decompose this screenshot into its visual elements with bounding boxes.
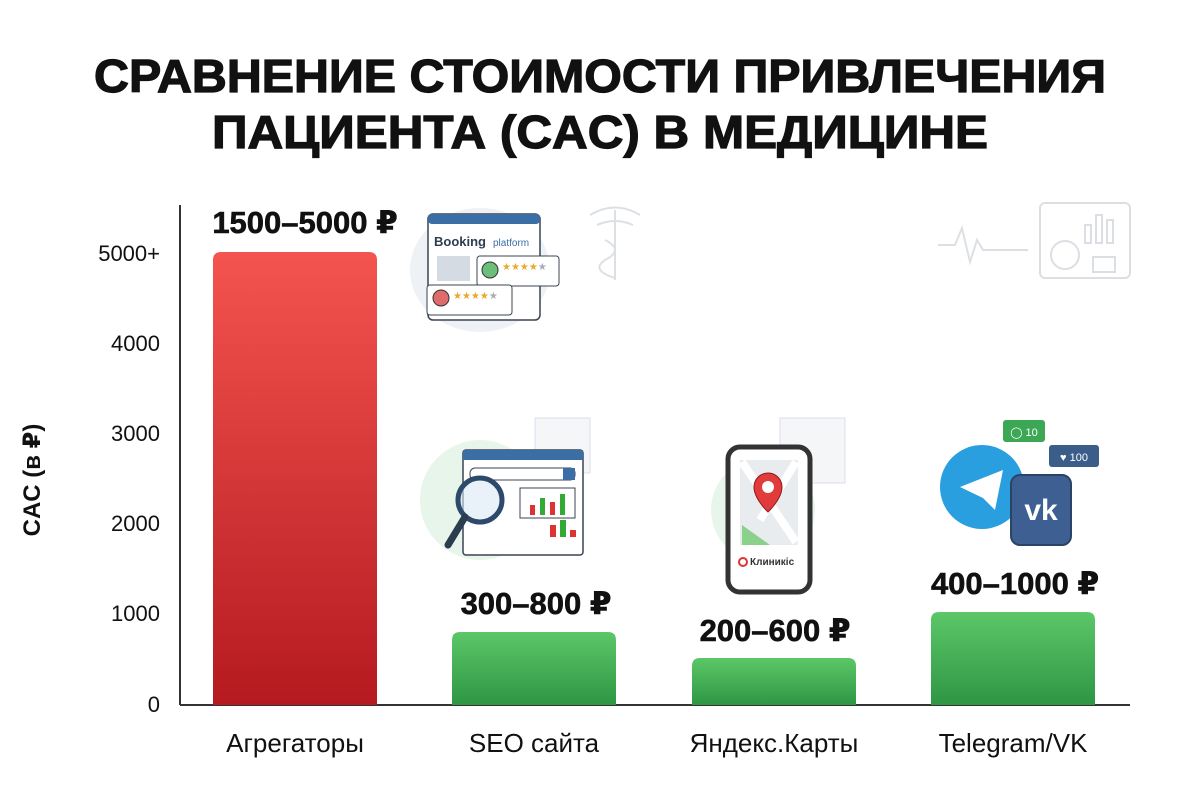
value labels: 1500–5000 ₽ xyxy=(212,205,398,240)
bar: Яндекс xyxy=(692,658,856,705)
icon: Telegram / VK: ◯ 10 xyxy=(1010,427,1038,439)
category labels: Telegram/VK xyxy=(939,728,1088,758)
bar: Агрегаторы xyxy=(213,252,377,705)
title: ПАЦИЕНТА (CAC) В МЕДИЦИНЕ xyxy=(212,106,988,158)
icon: map phone xyxy=(711,418,845,592)
category labels: Агрегаторы xyxy=(226,728,364,758)
icon: booking platform: ★★★★★ xyxy=(502,262,547,273)
value labels: 200–600 ₽ xyxy=(700,613,850,648)
y axis: 5000+ xyxy=(98,241,160,266)
icon: booking platform: ★★★★★ xyxy=(453,291,498,302)
y axis: 1000 xyxy=(111,601,160,626)
icon: booking platform: platform xyxy=(493,238,529,249)
y axis: 0 xyxy=(148,692,160,717)
y axis: 4000 xyxy=(111,331,160,356)
value labels: 400–1000 ₽ xyxy=(931,566,1099,601)
icon: Telegram / VK xyxy=(940,420,1099,545)
decorative background icons xyxy=(590,203,1130,280)
icon: SEO xyxy=(420,418,590,560)
value labels: 300–800 ₽ xyxy=(461,586,611,621)
icon: map phone: Клиникіс xyxy=(750,557,795,568)
icon: booking platform: Booking xyxy=(434,234,486,249)
y axis xyxy=(98,205,1130,717)
category labels xyxy=(226,728,1088,758)
icon: Telegram / VK: vk xyxy=(1024,494,1058,527)
bar: Telegram xyxy=(931,612,1095,705)
category labels: Яндекс.Карты xyxy=(690,728,858,758)
icon: Telegram / VK: ♥ 100 xyxy=(1060,452,1088,464)
category labels: SEO сайта xyxy=(469,728,600,758)
bar: SEO xyxy=(452,632,616,705)
y axis: 3000 xyxy=(111,421,160,446)
title: СРАВНЕНИЕ СТОИМОСТИ ПРИВЛЕЧЕНИЯ xyxy=(94,50,1106,102)
title xyxy=(94,50,1106,158)
icon: booking platform xyxy=(410,208,559,332)
value labels xyxy=(212,205,1099,648)
y axis label: CAC (в ₽) xyxy=(19,424,46,536)
y axis: 2000 xyxy=(111,511,160,536)
